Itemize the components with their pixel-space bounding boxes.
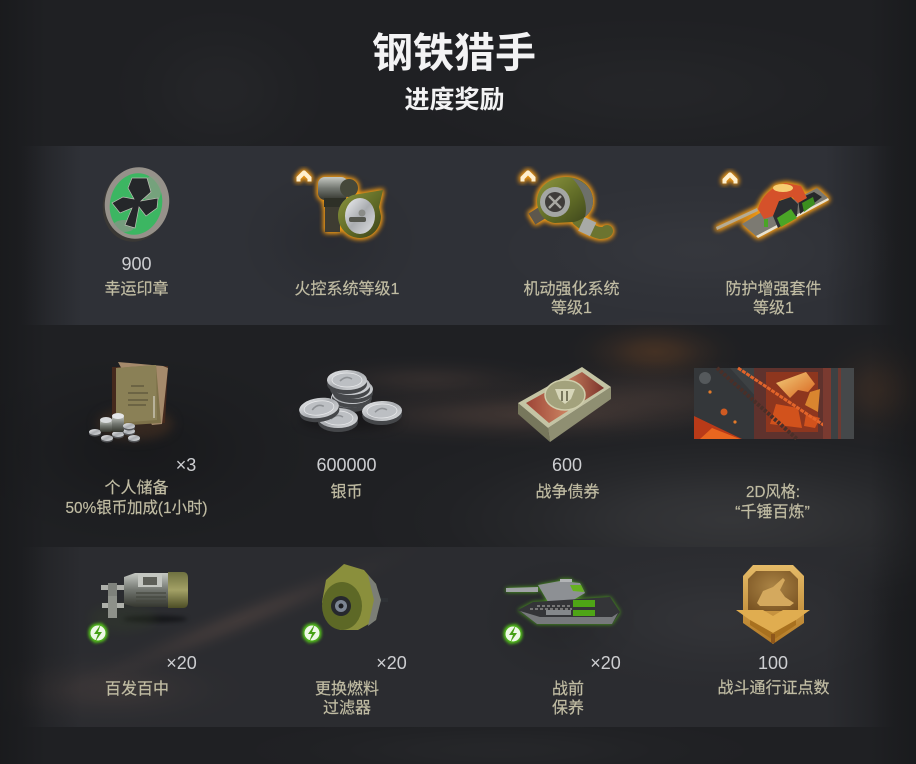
- label line 2: 等级1: [551, 299, 592, 317]
- reward: fire control: [295, 170, 400, 298]
- number: 100: [758, 653, 788, 673]
- label: 幸运印章: [104, 280, 169, 298]
- icon: fire control device: [318, 177, 383, 238]
- label line 2: 等级1: [753, 299, 794, 317]
- label: 百发百中: [105, 680, 169, 698]
- label: 个人储备: [104, 479, 169, 497]
- subtitle: 进度奖励: [404, 86, 505, 114]
- multiplier: ×20: [590, 653, 621, 673]
- label: 战斗通行证点数: [717, 679, 830, 697]
- reward: silver: [298, 370, 402, 501]
- label: 机动强化系统: [523, 280, 620, 298]
- icon: clover coin: [95, 160, 177, 249]
- reward: lucky seal: [95, 160, 177, 298]
- multiplier: ×20: [166, 653, 197, 673]
- reward: battle pass points: [717, 565, 830, 697]
- reward: preventive maintenance: [506, 579, 621, 717]
- icon: folder and coins: [89, 362, 168, 442]
- multiplier: ×20: [376, 653, 407, 673]
- multiplier: ×3: [176, 455, 196, 475]
- icon: coin pile: [298, 370, 402, 432]
- label line 2: 保养: [552, 699, 584, 717]
- label: 战争债券: [535, 483, 600, 501]
- icon: pixel tank: [506, 579, 620, 624]
- icon: motor: [89, 572, 188, 632]
- label line 2: 过滤器: [323, 699, 371, 717]
- number: 600: [552, 455, 582, 475]
- panel: row 3 band: [0, 527, 916, 730]
- label: 银币: [330, 483, 363, 501]
- label: 防护增强套件: [725, 280, 822, 298]
- icon: consumable badge: [90, 624, 106, 642]
- reward: mobility system: [520, 170, 620, 317]
- icon: filter: [322, 564, 388, 630]
- icon: wood shadow: [97, 408, 173, 440]
- icon: upgrade chevron: [722, 172, 738, 184]
- label: 战前: [552, 680, 584, 698]
- panel: row 2 band with blurred fire: [0, 316, 916, 630]
- icon: turbo: [532, 177, 607, 236]
- icon: bond stack: [518, 367, 611, 442]
- label line 2: 50%银币加成(1小时): [66, 499, 208, 517]
- icon: upgrade chevron: [520, 170, 536, 182]
- label line 2: “千锤百炼”: [735, 503, 810, 521]
- label: 更换燃料: [315, 680, 379, 698]
- label: 2D风格:: [746, 483, 800, 501]
- reward: personal reserve: [66, 362, 208, 517]
- title: 钢铁猎手: [372, 30, 536, 76]
- icon: armor tank: [716, 183, 829, 238]
- image: 2D style preview: [694, 368, 854, 439]
- icon: medal: [736, 565, 810, 644]
- number: 600000: [316, 455, 377, 475]
- reward: fuel filter: [304, 564, 407, 717]
- reward: hit-or-miss: [89, 572, 197, 698]
- number: 900: [121, 254, 152, 274]
- icon: consumable badge: [304, 624, 320, 642]
- panel: row 1 band: [20, 146, 916, 330]
- reward: war bonds: [518, 367, 611, 501]
- icon: upgrade chevron: [296, 170, 312, 182]
- reward: armor kit: [716, 172, 829, 317]
- icon: consumable badge: [506, 625, 520, 643]
- label: 火控系统等级1: [295, 280, 400, 298]
- reward: 2D style: [694, 368, 854, 521]
